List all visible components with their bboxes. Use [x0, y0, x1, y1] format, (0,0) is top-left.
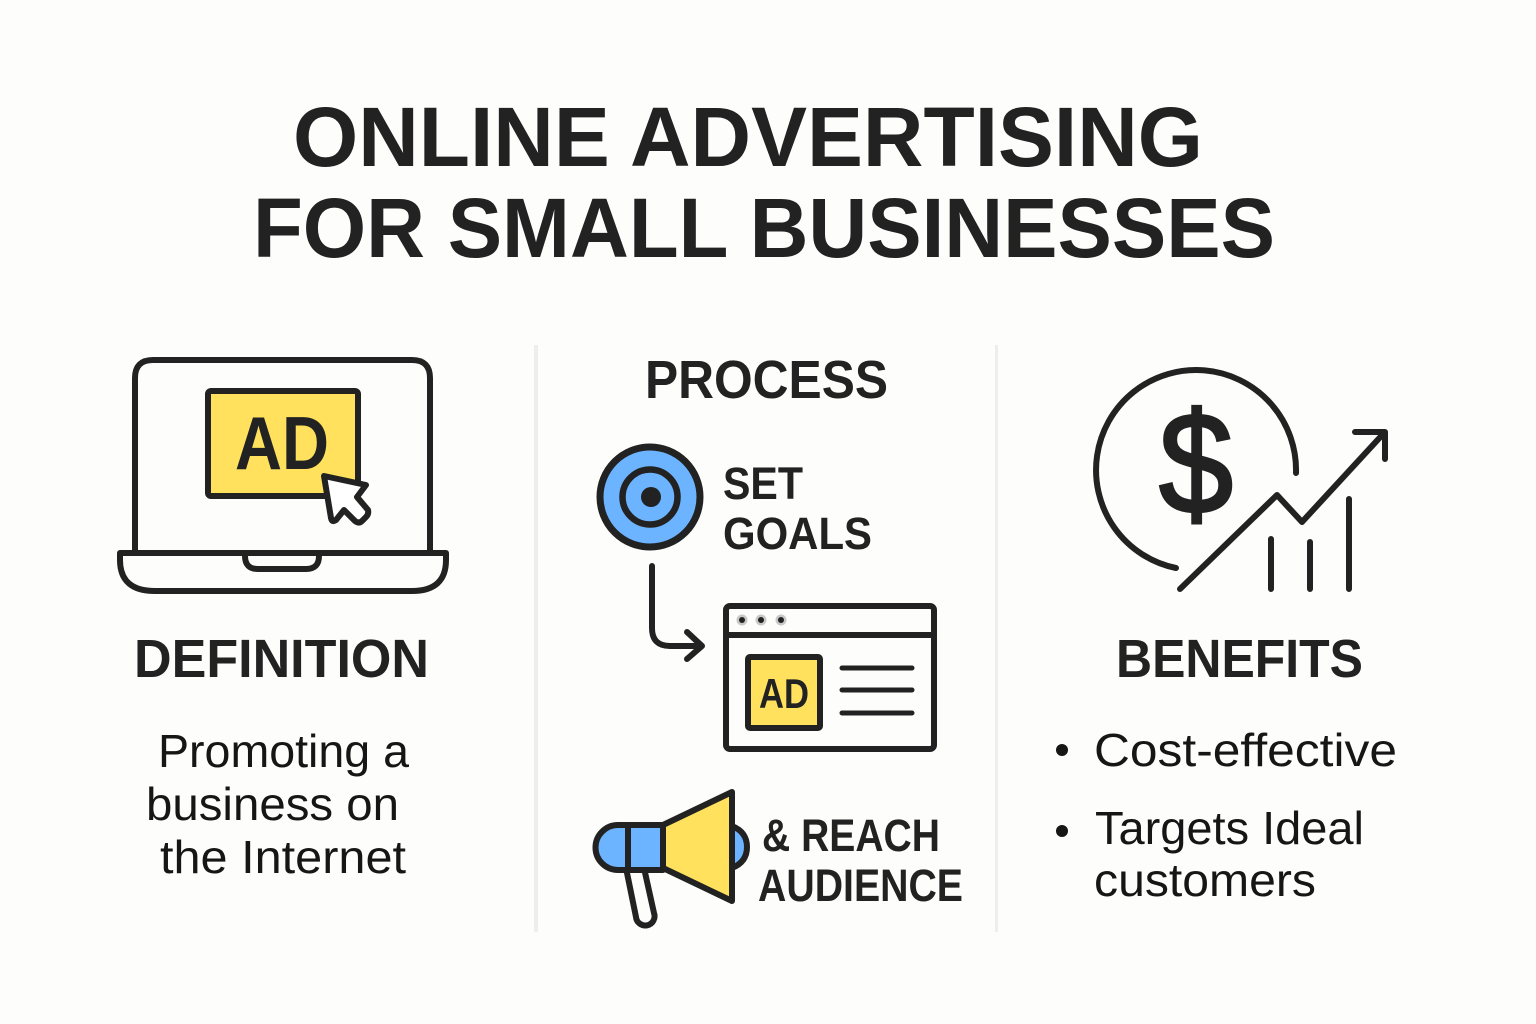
list: benefits: [1056, 724, 1397, 906]
title: [253, 90, 1275, 275]
icon: laptop with ad and cursor: [120, 360, 446, 591]
text: reach audience: & REACH: [762, 810, 940, 861]
list: benefits: Targets Ideal: [1095, 802, 1364, 854]
icon: browser window with ad: AD: [759, 670, 809, 717]
icon: dollar growth chart: [1096, 370, 1385, 589]
text: definition body: business on: [146, 778, 399, 830]
text: set goals: SET: [723, 458, 803, 509]
icon: target: [600, 447, 700, 547]
arrow: goals to ad: [652, 566, 702, 659]
heading: definition: DEFINITION: [134, 629, 429, 689]
icon: browser window with ad: [726, 606, 934, 749]
heading: process: PROCESS: [645, 350, 888, 410]
panel: benefits: [1056, 370, 1397, 906]
text: definition body: the Internet: [160, 831, 406, 883]
list: benefits: customers: [1094, 854, 1316, 906]
heading: benefits: BENEFITS: [1116, 629, 1363, 689]
list: benefits: Cost-effective: [1094, 724, 1397, 776]
text: set goals: [723, 458, 872, 559]
icon: megaphone: [596, 792, 747, 925]
panel: definition: [120, 360, 446, 883]
text: reach audience: AUDIENCE: [758, 860, 963, 911]
icon: laptop with ad and cursor: AD: [235, 401, 329, 485]
panel: process: [596, 350, 963, 925]
text: set goals: GOALS: [723, 508, 872, 559]
title: ONLINE ADVERTISING: [293, 90, 1203, 184]
text: definition body: Promoting a: [158, 725, 409, 777]
text: reach audience: [758, 810, 963, 911]
icon: dollar growth chart: $: [1159, 383, 1233, 544]
title: FOR SMALL BUSINESSES: [253, 181, 1275, 275]
text: definition body: [146, 725, 409, 883]
